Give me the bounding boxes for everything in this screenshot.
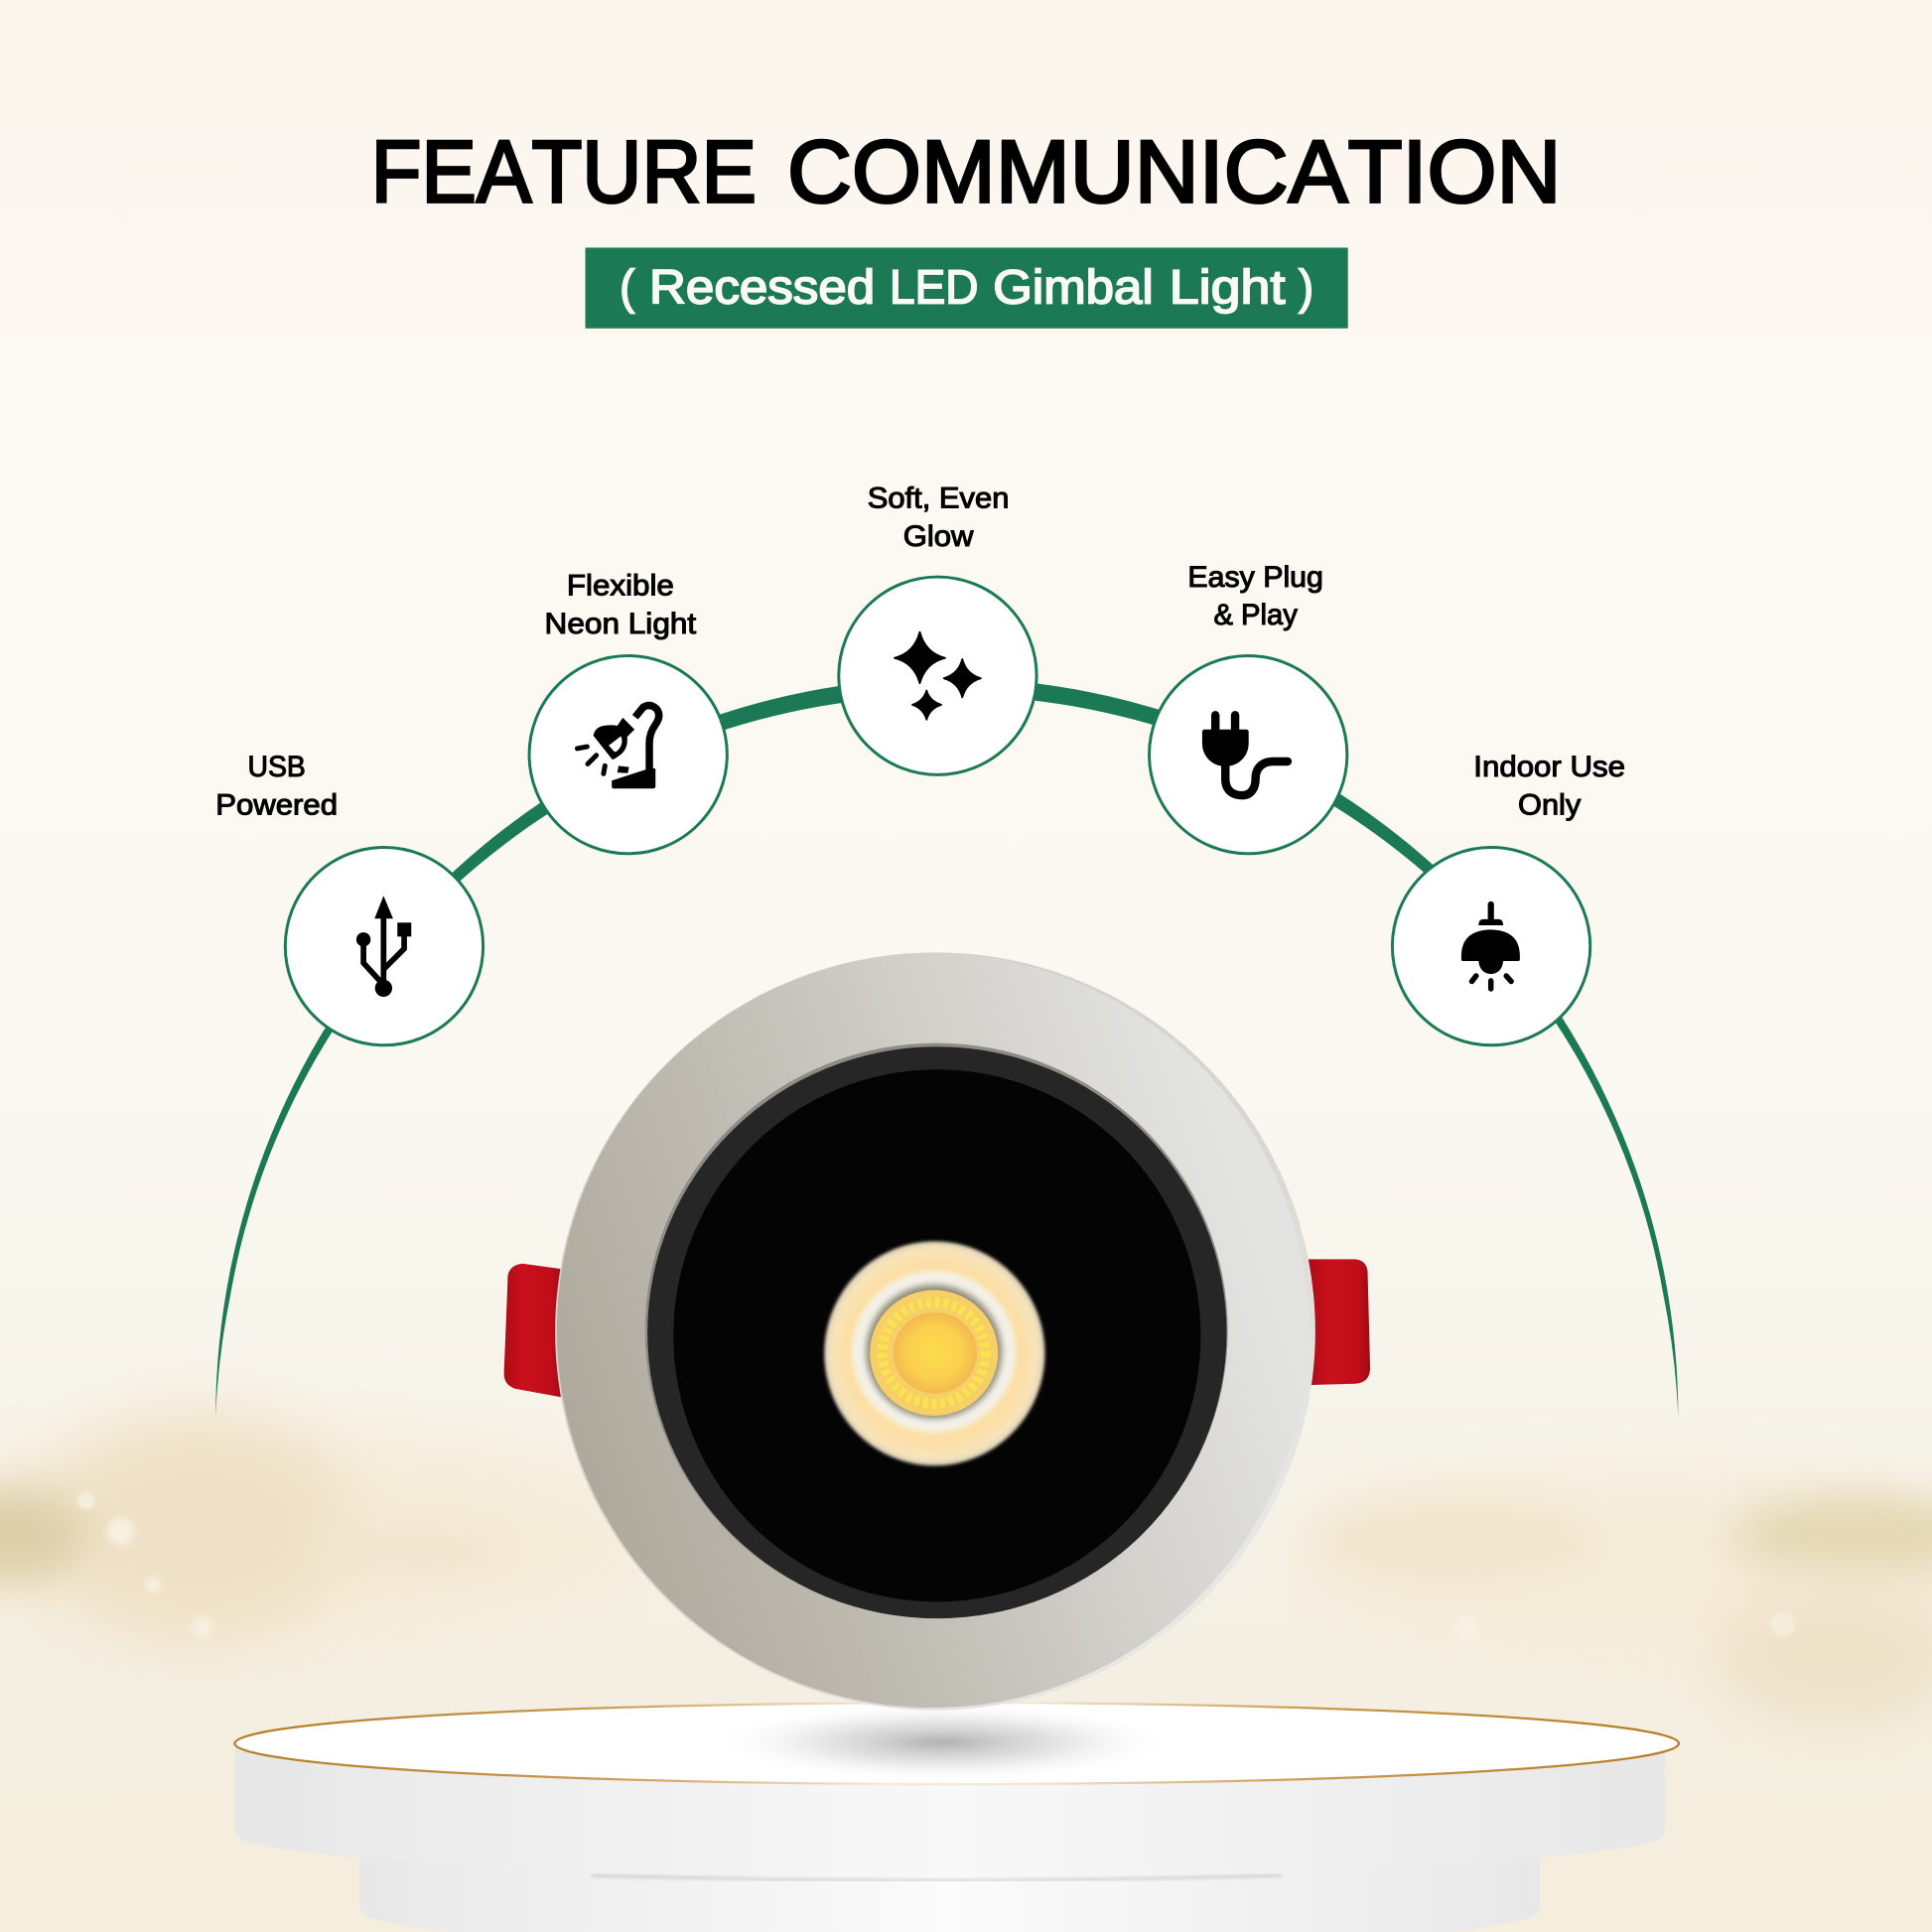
label: Indoor Use Only: Only: [1518, 789, 1582, 821]
icon: USB: [356, 896, 411, 997]
feature: USB Powered: [215, 752, 483, 1045]
title: COMMUNICATION: [787, 122, 1561, 221]
label: Soft, Even Glow: Glow: [903, 521, 974, 553]
label: Indoor Use Only: Indoor Use: [1473, 752, 1625, 783]
dark inner bezel: [647, 1046, 1226, 1618]
circle: [1392, 847, 1590, 1045]
label: USB Powered: USB: [247, 752, 306, 783]
label: Flexible Neon Light: Neon Light: [545, 609, 696, 640]
subtitle banner: Recessed: [649, 261, 875, 315]
podium upper tier: [235, 1743, 1665, 1875]
circle: [839, 577, 1036, 774]
subtitle banner: Gimbal: [993, 261, 1154, 315]
feature: Soft, Even Glow: [839, 483, 1036, 774]
product: recessed gimbal light: [504, 952, 1370, 1711]
label: USB Powered: Powered: [215, 789, 338, 821]
black recess: [673, 1069, 1200, 1601]
subtitle banner: (: [620, 261, 634, 315]
red clip right: [1309, 1259, 1370, 1385]
label: Flexible Neon Light: Flexible: [567, 570, 674, 602]
circle: [285, 847, 483, 1045]
feature: Indoor Use Only: [1392, 752, 1625, 1045]
circle: [1150, 655, 1347, 854]
title: FEATURE: [371, 122, 757, 221]
label: Soft, Even Glow: Soft, Even: [868, 483, 1009, 514]
red clip left: [504, 1264, 562, 1397]
icon: pendant lamp: [1461, 901, 1520, 989]
podium top: [234, 1703, 1679, 1784]
label: Easy Plug & Play: Easy Plug: [1187, 562, 1323, 594]
outer white ring: [555, 952, 1315, 1711]
LED lens: [824, 1241, 1044, 1465]
icon: desk lamp: [577, 706, 659, 788]
subtitle banner: Light: [1170, 261, 1286, 315]
contact shadow: [709, 1702, 1176, 1783]
feature: Flexible Neon Light: [529, 570, 727, 854]
feature: Easy Plug & Play: [1150, 562, 1347, 854]
podium: [234, 1702, 1679, 1932]
icon: sparkles: [895, 632, 981, 720]
connecting arc: [215, 678, 1678, 1417]
subtitle banner: [586, 247, 1348, 329]
icon: plug: [1202, 711, 1288, 795]
podium lower tier: [359, 1849, 1540, 1932]
subtitle banner: LED: [890, 261, 978, 315]
circle: [529, 655, 727, 854]
subtitle banner: ): [1299, 261, 1313, 315]
label: Easy Plug & Play: & Play: [1213, 600, 1298, 631]
